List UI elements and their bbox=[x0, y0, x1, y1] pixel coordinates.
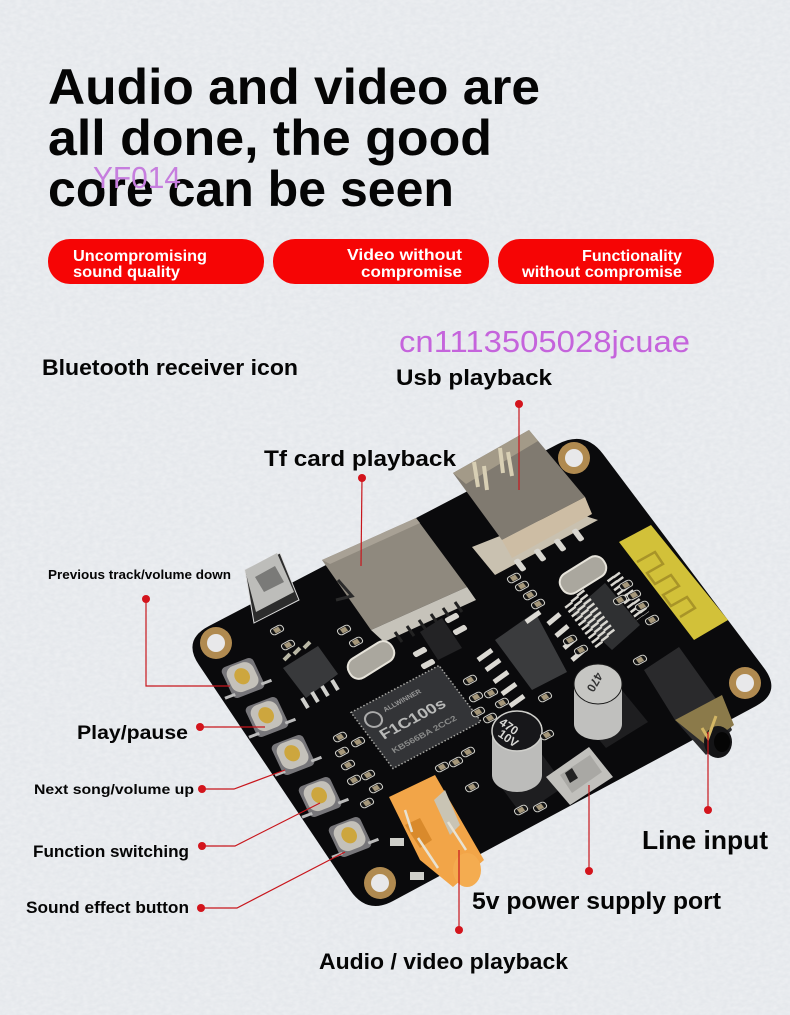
leader: line input bbox=[704, 732, 712, 814]
bluetooth module connector bbox=[245, 553, 299, 623]
label: usb playback: Usb playback bbox=[396, 365, 553, 390]
capacitors: 470 bbox=[497, 715, 521, 738]
label: 5v power: 5v power supply port bbox=[472, 888, 721, 915]
leader: function switching bbox=[198, 803, 320, 850]
tf card slot bbox=[322, 518, 476, 642]
leader: next song bbox=[198, 770, 285, 793]
leader: play pause bbox=[196, 723, 265, 731]
leader: 5v power bbox=[585, 785, 593, 875]
capacitors: 470 bbox=[584, 670, 606, 695]
soic chip bbox=[478, 612, 584, 706]
capacitors: 10V bbox=[495, 727, 521, 750]
label: bluetooth receiver icon: Bluetooth receiver icon bbox=[42, 355, 298, 380]
antenna bbox=[619, 525, 728, 640]
circuit board bbox=[192, 430, 771, 906]
main processor bbox=[351, 666, 481, 768]
leader: usb playback bbox=[515, 400, 523, 490]
push buttons bbox=[213, 654, 380, 861]
smd components bbox=[269, 572, 660, 816]
main processor: KB566BA 2CC2 bbox=[390, 714, 459, 755]
orange audio jack bbox=[389, 775, 484, 887]
usb socket bbox=[453, 430, 598, 575]
black line-in jack bbox=[644, 647, 734, 758]
label: tf card playback: Tf card playback bbox=[264, 446, 457, 471]
label: play pause: Play/pause bbox=[77, 723, 188, 744]
title: all done, the good bbox=[48, 110, 492, 166]
audio amp chip bbox=[568, 574, 646, 650]
label: line input: Line input bbox=[642, 825, 768, 855]
leader: sound effect bbox=[197, 852, 345, 912]
label: function switching: Function switching bbox=[33, 843, 189, 861]
label: previous track: Previous track/volume down bbox=[48, 568, 231, 582]
label: sound effect: Sound effect button bbox=[26, 899, 189, 917]
main processor: ALLWINNER bbox=[382, 689, 423, 714]
title: core can be seen bbox=[48, 161, 454, 217]
pill: sound quality bbox=[48, 239, 264, 284]
pill: sound quality: Uncompromising bbox=[73, 248, 207, 265]
pill: video: compromise bbox=[361, 264, 462, 281]
pill: sound quality: sound quality bbox=[73, 264, 180, 281]
small chip bbox=[412, 612, 468, 670]
label: audio video playback: Audio / video playback bbox=[319, 949, 569, 974]
capacitors bbox=[492, 664, 648, 815]
pill: functionality bbox=[498, 239, 714, 284]
leader: audio video bbox=[455, 850, 463, 934]
pill: functionality: Functionality bbox=[582, 248, 682, 265]
crystals bbox=[344, 552, 610, 683]
pill: video: Video without bbox=[347, 247, 463, 264]
main processor: F1C100s bbox=[376, 696, 450, 743]
micro usb port bbox=[546, 747, 613, 805]
leader: previous track bbox=[142, 595, 230, 686]
mounting holes bbox=[200, 442, 761, 899]
title bbox=[48, 59, 540, 217]
leader: tf card playback bbox=[358, 474, 366, 566]
flash chip bbox=[283, 642, 338, 708]
watermark: store id: cn1113505028jcuae bbox=[399, 324, 690, 359]
pill: functionality: without compromise bbox=[521, 264, 682, 281]
watermark: YF014: YF014 bbox=[93, 160, 181, 195]
label: next song: Next song/volume up bbox=[34, 781, 194, 797]
title: Audio and video are bbox=[48, 59, 540, 115]
pill: video bbox=[273, 239, 489, 284]
pcb bbox=[192, 439, 771, 906]
